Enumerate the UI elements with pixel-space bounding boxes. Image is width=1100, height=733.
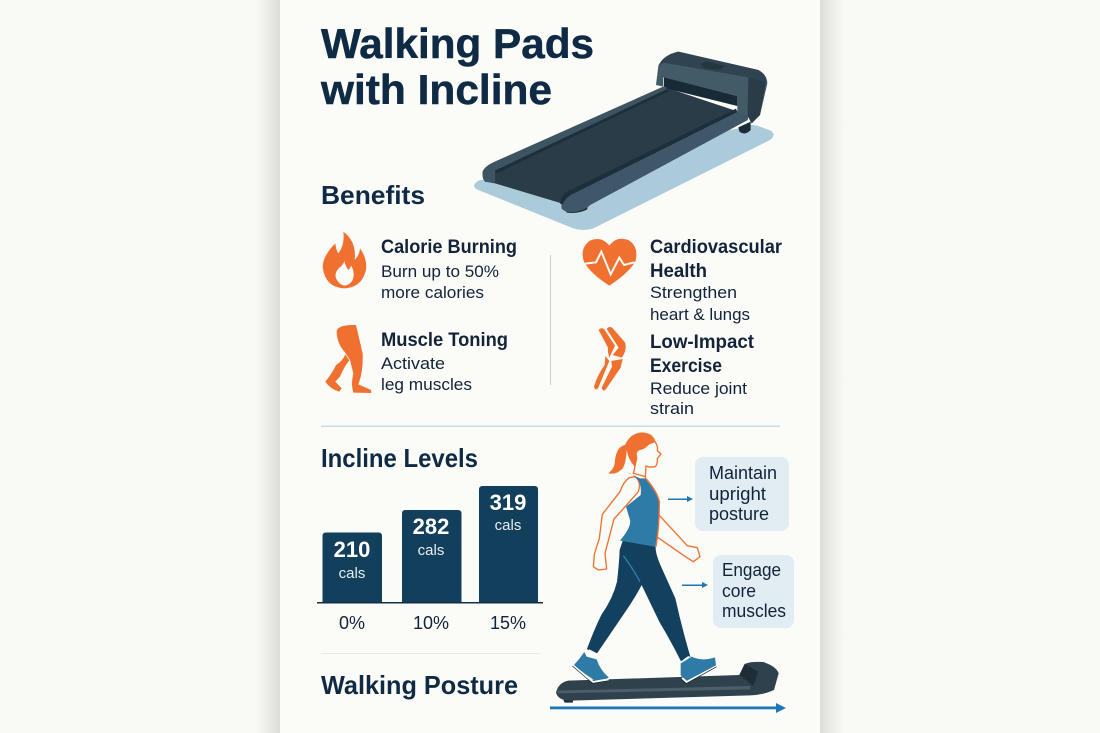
- text: low-impact exercise: strain: [650, 399, 694, 418]
- socks: [585, 649, 598, 660]
- title: [320, 20, 594, 113]
- icon: flame: [323, 232, 366, 288]
- callout: maintain upright posture: [695, 457, 789, 531]
- text: calorie burning: Calorie Burning: [381, 237, 517, 258]
- front arm: [657, 514, 700, 562]
- back arm: [593, 477, 639, 570]
- heading: incline levels: Incline Levels: [321, 443, 478, 473]
- panel: page: [280, 0, 820, 733]
- text: muscle toning: Muscle Toning: [381, 330, 508, 351]
- callout: maintain upright posture: upright: [709, 484, 766, 504]
- bar: 10%: [402, 510, 462, 602]
- text: low-impact exercise: Exercise: [650, 356, 722, 377]
- text: cardiovascular health: Strengthen: [650, 283, 737, 302]
- text: calorie burning: more calories: [381, 283, 484, 302]
- heading: benefits: Benefits: [321, 180, 425, 210]
- axis labels: 0%: [339, 613, 365, 633]
- text: cardiovascular health: Health: [650, 261, 707, 282]
- illustration: walking figure on pad: [556, 432, 779, 703]
- text: muscle toning: [381, 330, 508, 394]
- text: low-impact exercise: [650, 332, 755, 418]
- bar: 15%: [479, 486, 538, 602]
- text: muscle toning: Activate: [381, 354, 445, 373]
- callout: maintain upright posture: posture: [709, 504, 769, 524]
- divider: [550, 255, 551, 385]
- arrow: floor direction: [550, 703, 786, 713]
- text: cardiovascular health: heart & lungs: [650, 305, 750, 324]
- icon: knee joint: [594, 327, 626, 390]
- title: with Incline: [320, 66, 552, 113]
- text: low-impact exercise: Low-Impact: [650, 332, 755, 353]
- bar chart: calories by incline: [317, 486, 543, 633]
- callout: engage core muscles: Engage: [722, 560, 781, 580]
- illustration: walking pad: [474, 52, 774, 230]
- text: muscle toning: leg muscles: [381, 375, 472, 394]
- axis labels: [339, 613, 526, 633]
- arrow: to core callout: [682, 582, 708, 588]
- face and neck: [630, 442, 661, 477]
- bar: 0%: 210: [334, 537, 370, 562]
- callout: engage core muscles: [713, 555, 794, 628]
- bar: 0%: cals: [339, 565, 365, 582]
- callout: engage core muscles: core: [722, 581, 756, 601]
- hair: [608, 432, 655, 474]
- tank top: [620, 473, 659, 547]
- callout: maintain upright posture: Maintain: [709, 463, 777, 483]
- bar: 15%: 319: [490, 490, 526, 515]
- heading: walking posture: Walking Posture: [321, 670, 518, 700]
- bar: 0%: [322, 532, 382, 602]
- axis labels: 10%: [413, 613, 449, 633]
- axis labels: 15%: [490, 613, 526, 633]
- text: low-impact exercise: Reduce joint: [650, 379, 747, 398]
- icon: heart: [583, 239, 636, 286]
- bar: 10%: 282: [413, 514, 449, 539]
- text: cardiovascular health: [650, 237, 783, 324]
- callout: engage core muscles: muscles: [722, 601, 786, 621]
- leggings: [587, 540, 690, 663]
- bar: 15%: cals: [495, 517, 521, 534]
- title: Walking Pads: [321, 20, 594, 67]
- icon: leg: [325, 325, 371, 393]
- text: cardiovascular health: Cardiovascular: [650, 237, 783, 258]
- text: calorie burning: Burn up to 50%: [381, 262, 499, 281]
- treadmill side view: [556, 662, 779, 703]
- shoes: [574, 652, 609, 681]
- arrow: to posture callout: [668, 496, 693, 502]
- bar: 10%: cals: [418, 542, 444, 559]
- text: calorie burning: [381, 237, 517, 302]
